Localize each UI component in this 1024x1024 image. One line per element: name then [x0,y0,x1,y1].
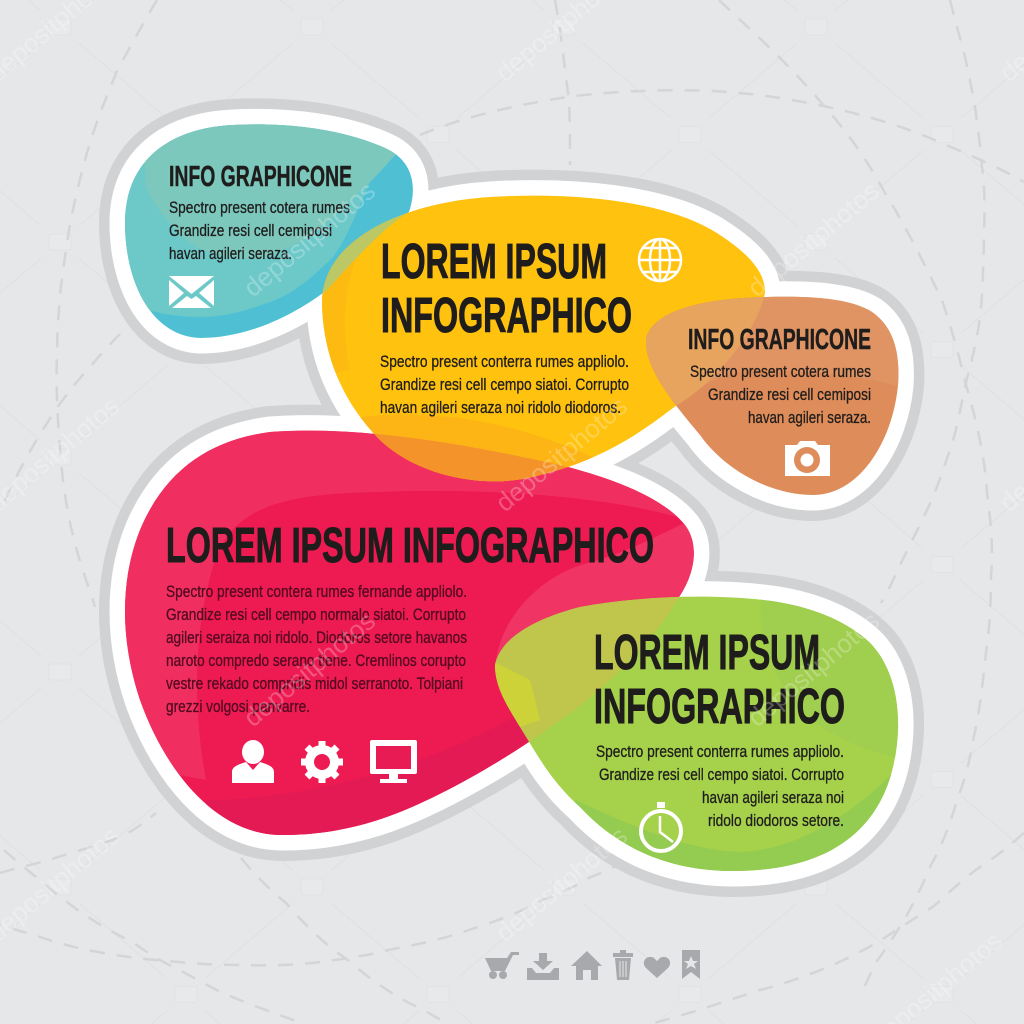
text: pink body: naroto compredo serano tiene. Cremlinos corupto [166,651,466,670]
panel: green blob [495,596,898,871]
text: green body [596,742,844,830]
text: orange body: Spectro present cotera rumes [690,362,871,381]
watermarks: depositphotos [238,176,381,303]
text: green body: ridolo diodoros setore. [708,811,844,830]
text: yellow body: Grandize resi cell cempo siatoi. Corrupto [380,375,629,394]
overlap: yellow and orange [646,297,764,406]
text: orange body: Grandize resi cell cemiposi [708,385,871,404]
heading: green: LOREM IPSUM [594,626,820,680]
heading: green [594,626,845,734]
text: green body: havan agileri seraza noi [702,788,844,807]
text: teal body: Spectro present cotera rumes [169,198,350,217]
icon: gear [301,741,343,783]
text: orange body [690,362,871,427]
text: pink body: Spectro present contera rumes fernande appliolo. [166,582,467,601]
icon: trash [613,950,633,980]
text: pink body: Grandize resi cell cempo normalo siatoi. Corrupto [166,605,466,624]
heading: pink: LOREM IPSUM INFOGRAPHICO [166,519,654,573]
text: pink body: vestre rekado compridis midol serranoto. Tolpiani [166,674,463,693]
icon: bookmark [682,950,700,979]
watermarks: depositphotos [238,606,381,733]
icon: person [232,740,274,783]
heading: yellow [381,235,632,343]
panel: yellow blob [322,196,765,482]
icon: envelope [169,276,214,308]
overlap: pink and green [495,596,679,742]
panel: teal blob [125,124,413,338]
heading: yellow: INFOGRAPHICO [381,289,632,343]
panel: pink blob [125,430,694,835]
overlap: teal and yellow [322,213,407,294]
text: teal body [169,198,350,263]
panel: orange blob [646,296,898,495]
text: teal body: Grandize resi cell cemiposi [169,221,332,240]
watermarks: depositphotos [742,176,885,303]
icon row: toolbar icons [485,950,700,980]
text: yellow body: Spectro present conterra rumes appliolo. [380,352,629,371]
heading: yellow: LOREM IPSUM [381,235,607,289]
outline: gray border behind all shapes [125,124,898,871]
icon: heart [644,957,670,978]
text: pink body [166,582,467,716]
watermarks: depositphotos [490,821,633,948]
text: pink body: grezzi volgosi panvarre. [166,697,310,716]
watermarks: depositphotos [742,606,885,733]
text: yellow body: havan agileri seraza noi ridolo diodoros. [380,398,621,417]
text: green body: Spectro present conterra rumes appliolo. [596,742,844,761]
text: orange body: havan agileri seraza. [748,408,871,427]
text: pink body: agileri seraiza noi ridolo. Diodoros setore havanos [166,628,467,647]
icon: monitor [370,740,417,783]
text: yellow body [380,352,629,417]
heading: orange: INFO GRAPHICONE [688,324,871,356]
icon: home [571,951,602,980]
heading: teal: INFO GRAPHICONE [169,161,352,193]
text: green body: Grandize resi cell cempo siatoi. Corrupto [599,765,844,784]
outline: white border [125,124,898,871]
overlap: pink and yellow [374,434,567,482]
heading: green: INFOGRAPHICO [594,680,845,734]
icon: globe [639,239,681,281]
icon: camera [785,441,830,476]
icon: download [527,953,559,980]
watermarks: depositphotos [490,391,633,518]
icon: cart [485,952,519,979]
text: teal body: havan agileri seraza. [169,244,292,263]
icon: stopwatch [641,802,681,851]
